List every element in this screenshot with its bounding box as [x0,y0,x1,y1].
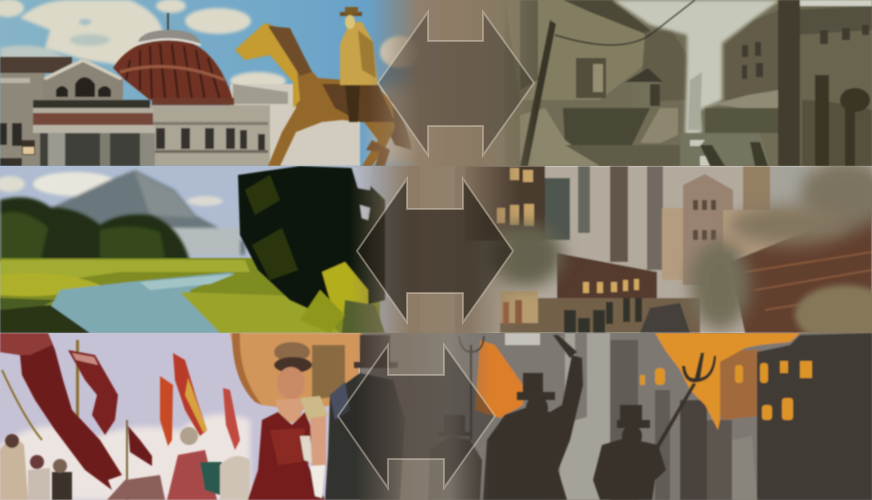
centre colour fade [355,333,490,500]
tree line [0,197,190,262]
red banners [0,333,240,500]
arrow: double-headed transition arrow, middle band [357,179,513,322]
sky and mountains [0,166,420,333]
meadow and water [0,258,380,333]
silhouettes with top hats and pitchforks [428,335,716,500]
arrow: double-headed transition arrow, bottom band [338,345,495,488]
panel: grand palace and equestrian statue versus ruined slum [0,0,872,166]
centre colour fade [350,166,520,333]
arrow: double-headed transition arrow, top band [378,12,534,155]
large dark tree [238,166,385,333]
industrial town [455,160,872,345]
gold equestrian statue [235,7,412,166]
dome [113,13,234,105]
top-hatted gentleman [325,335,405,500]
ruined slum [505,0,872,166]
festive sky [0,333,360,500]
palace building [0,57,360,166]
panel: clean green wetland versus smoky industrial town [0,160,872,345]
panel: festive crowd versus angry torch-lit mob [0,333,872,500]
sky with clouds [0,0,440,166]
mob and fire [475,333,872,500]
centre colour fade [368,0,538,166]
woman with parasol in red dress [230,333,362,500]
festive crowd [0,427,250,500]
